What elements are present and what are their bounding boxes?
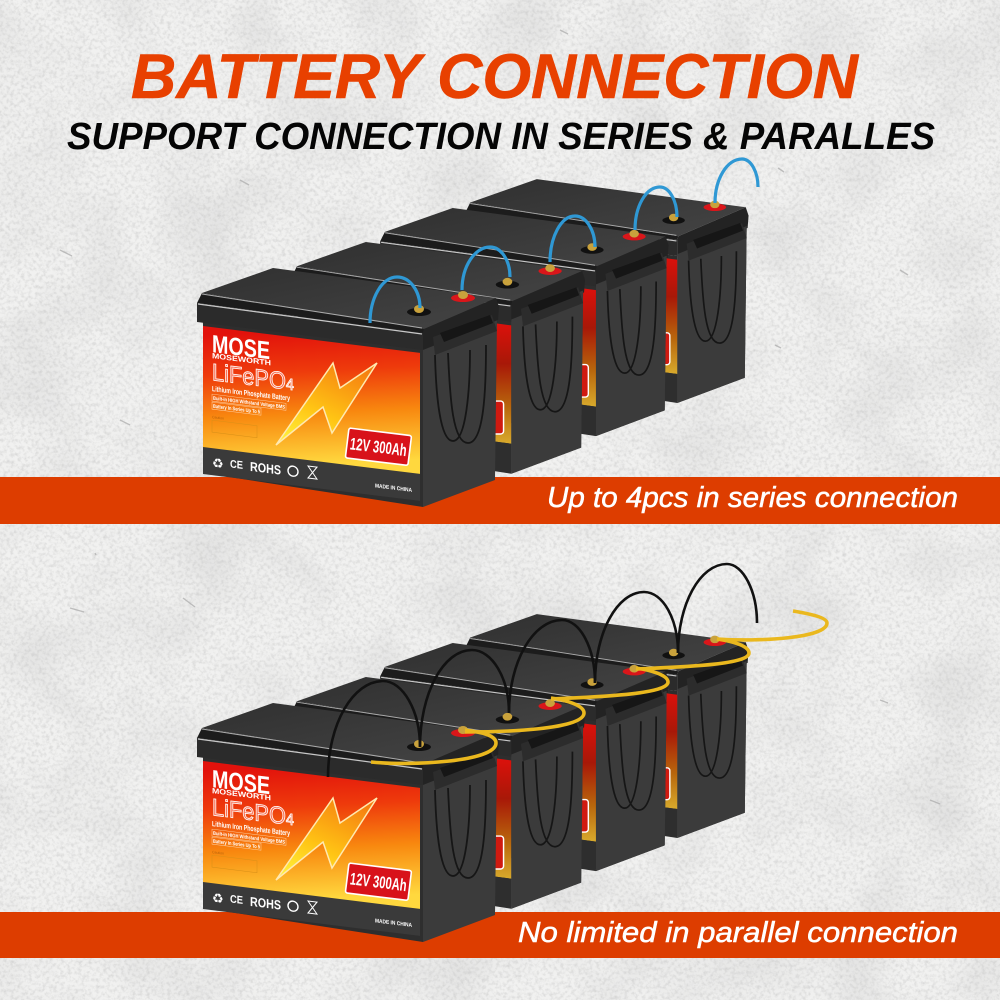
battery label: CE [230, 458, 243, 472]
battery label: LiFePO4 [212, 359, 294, 396]
battery label: MOSE [212, 765, 270, 800]
battery label: MADE IN CHINA [375, 483, 412, 494]
series wires: blue [370, 159, 758, 323]
lightning bolt [276, 363, 377, 445]
lightning bolt [276, 798, 377, 880]
battery label: MOSEWORTH [212, 786, 271, 802]
battery label: Built-in HIGH Withstand Voltage BMS [213, 396, 285, 411]
battery label: Battery In Series Up To 5 [213, 839, 260, 851]
banner: series [0, 477, 1000, 524]
battery label: ♻ [212, 455, 224, 472]
banner: parallel [0, 912, 1000, 958]
battery label: Caution [212, 850, 224, 856]
front battery [197, 268, 499, 507]
battery label: MADE IN CHINA [375, 918, 412, 929]
battery label [203, 326, 420, 501]
battery 4 [466, 179, 749, 403]
battery label: Built-in HIGH Withstand Voltage BMS [213, 831, 285, 846]
parallel battery group [197, 614, 749, 942]
battery label: Lithium Iron Phosphate Battery [212, 819, 291, 838]
battery label [203, 761, 420, 936]
subtitle: SUPPORT CONNECTION IN SERIES & PARALLES [67, 116, 935, 158]
banner text: series: Up to 4pcs in series connection [547, 482, 958, 514]
battery 4 [466, 614, 749, 838]
title: BATTERY CONNECTION [131, 42, 859, 112]
battery label: Battery In Series Up To 5 [213, 404, 260, 416]
capacity badge [345, 863, 412, 900]
battery label: ROHS [250, 894, 281, 913]
battery 2 [292, 677, 585, 909]
capacity badge [345, 428, 412, 465]
battery label: ♻ [212, 890, 224, 907]
capacity badge: 12V 300Ah [349, 434, 408, 460]
parallel wires: black [328, 564, 757, 777]
front battery [197, 703, 499, 942]
battery label: Caution [212, 415, 224, 421]
series battery group [197, 179, 749, 507]
parallel wires: yellow [371, 611, 827, 763]
battery 3 [380, 208, 669, 436]
battery label: ROHS [250, 459, 281, 478]
battery label: LiFePO4 [212, 794, 294, 831]
battery label: MOSEWORTH [212, 351, 271, 367]
battery 2 [292, 242, 585, 474]
capacity badge: 12V 300Ah [349, 869, 408, 895]
battery label: CE [230, 893, 243, 907]
banner text: parallel: No limited in parallel connection [518, 917, 958, 949]
battery 3 [380, 643, 669, 871]
battery label: MOSE [212, 330, 270, 365]
battery label: Lithium Iron Phosphate Battery [212, 384, 291, 403]
